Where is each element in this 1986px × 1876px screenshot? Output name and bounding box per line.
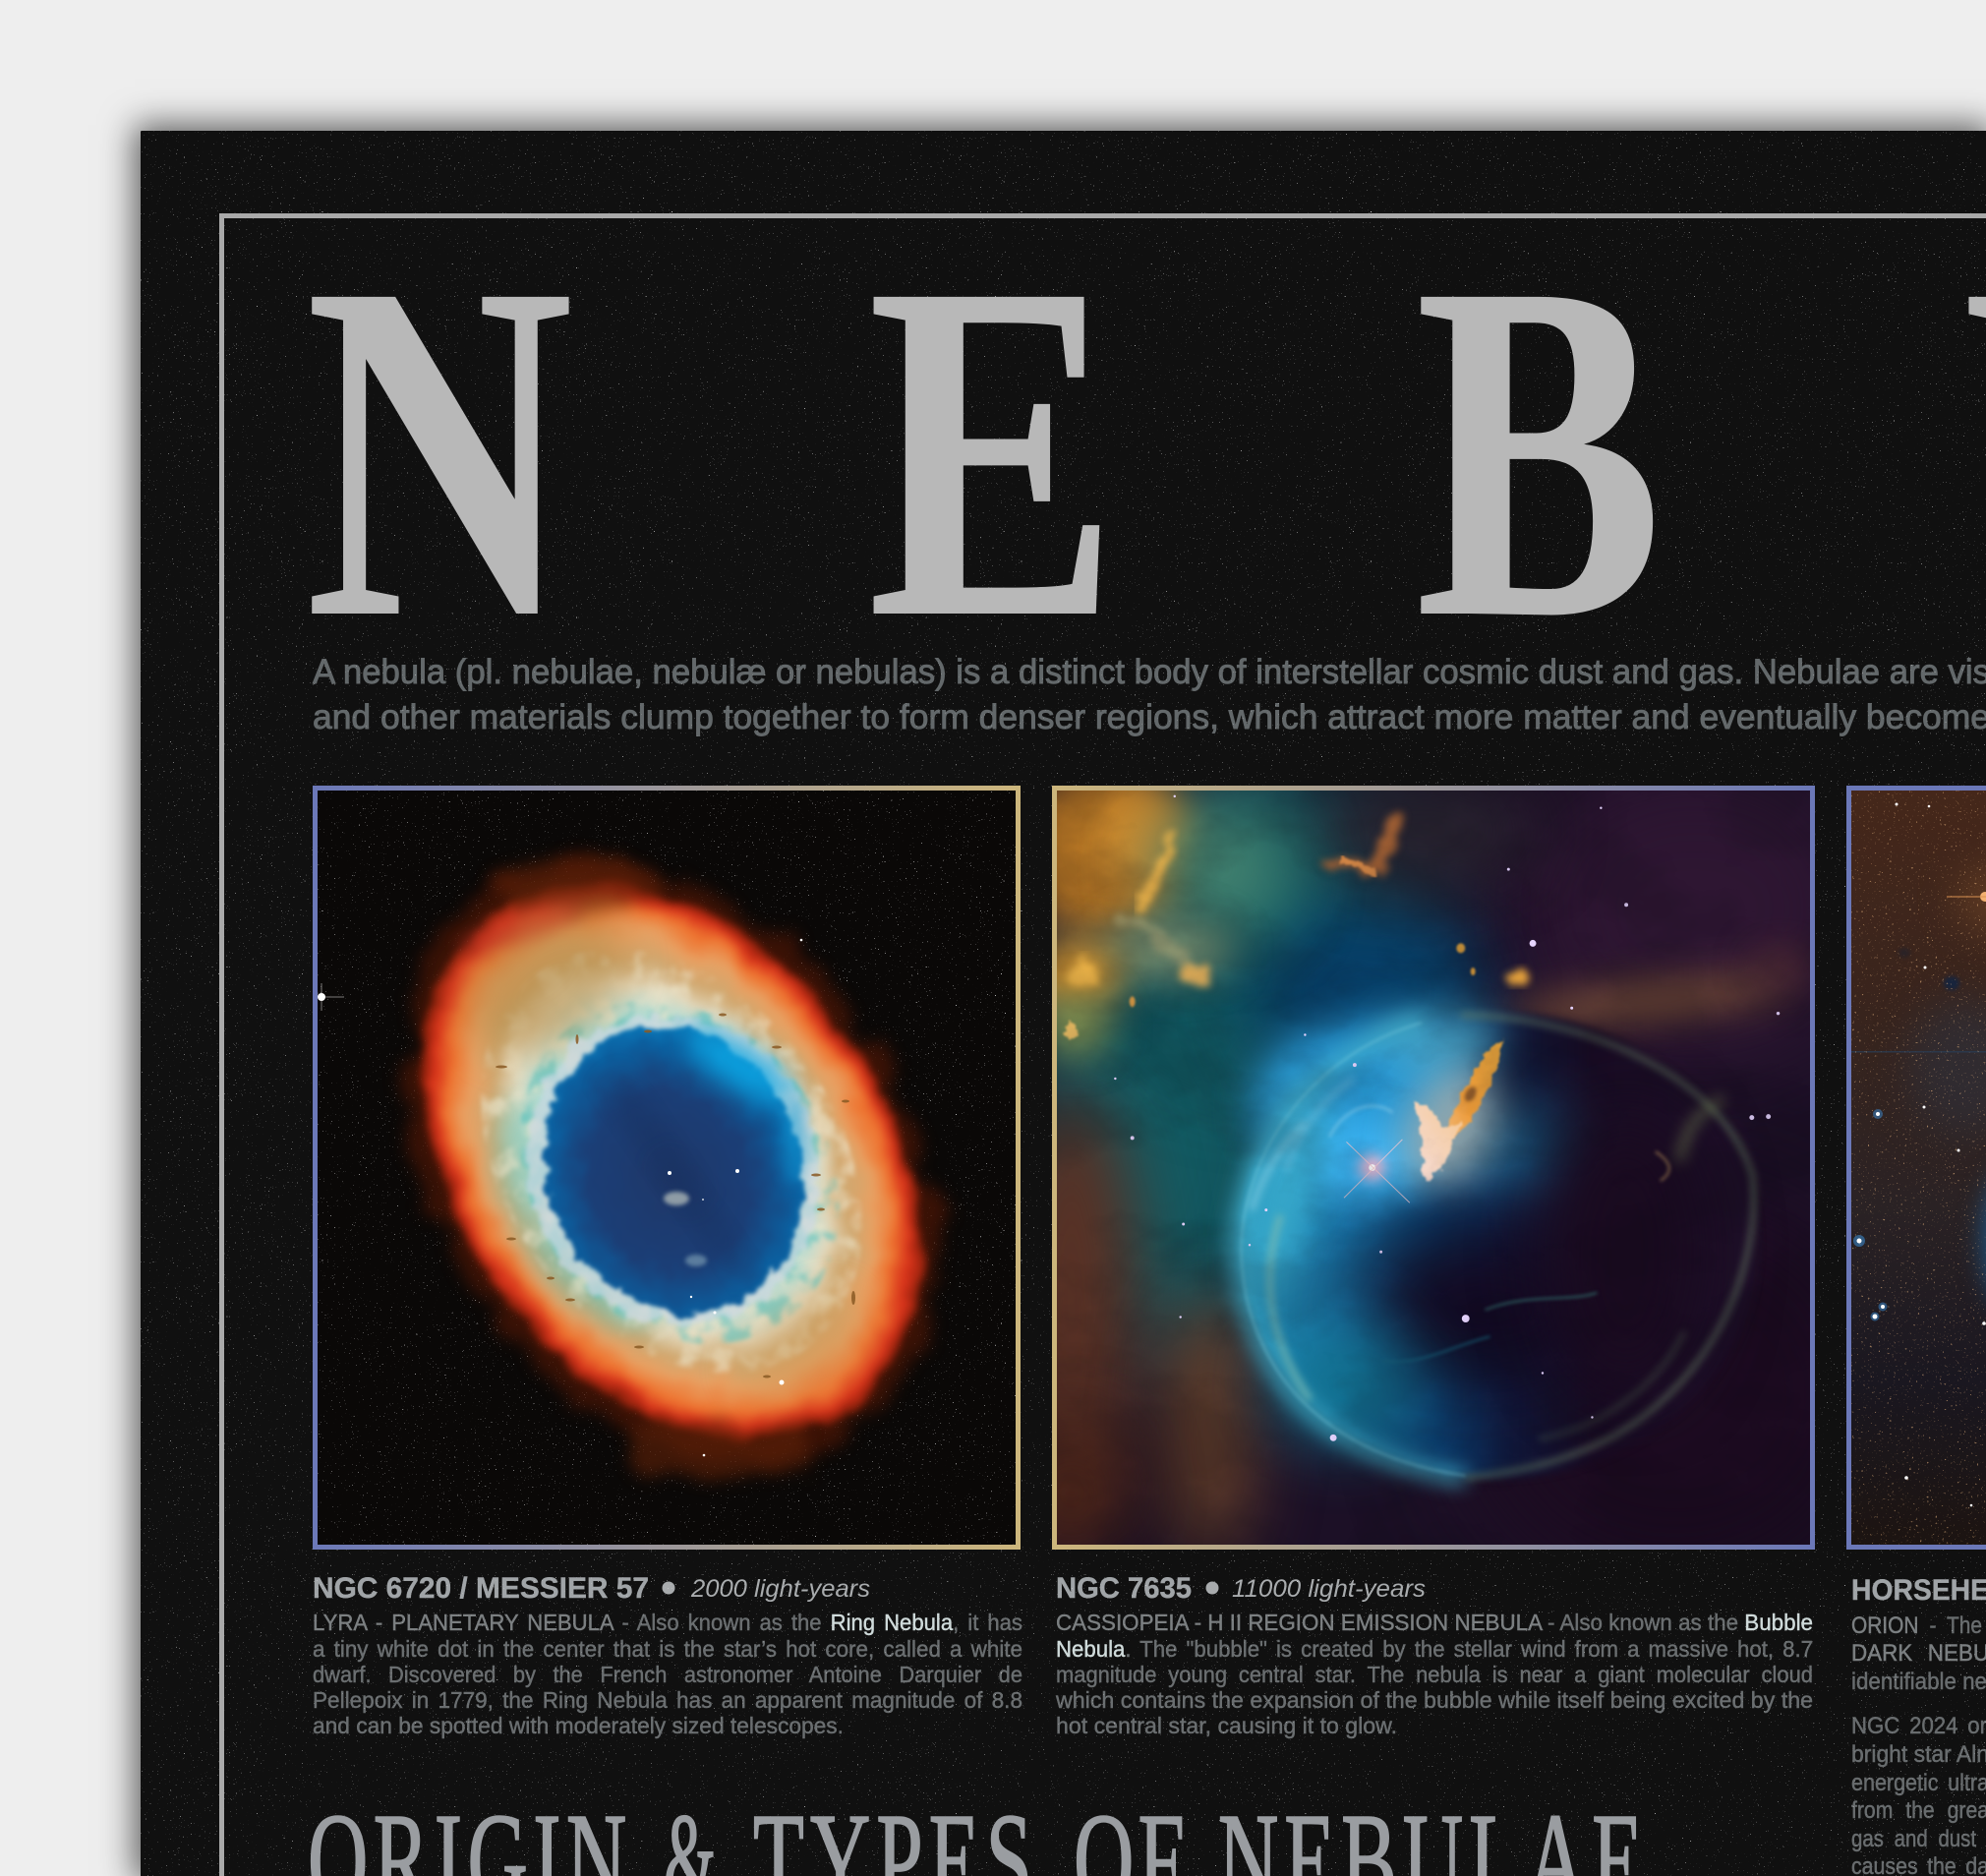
main title: E bbox=[867, 184, 1119, 719]
panel: Horsehead Nebula bbox=[1848, 789, 1986, 1548]
caption: Ring Nebula: NGC 6720 / MESSIER 57 bbox=[313, 1572, 649, 1605]
caption: Bubble Nebula: magnitude young central star. The nebula is near a giant molecular cloud bbox=[1056, 1662, 1813, 1687]
gas clouds bbox=[1057, 791, 1877, 1545]
caption: Bubble Nebula: which contains the expansion of the bubble while itself being excited by the bbox=[1055, 1687, 1813, 1713]
intro paragraph: A nebula (pl. nebulae, nebulæ or nebulas) is a distinct body of interstellar cosmic dust and gas. Nebulae are vis bbox=[313, 653, 1986, 691]
caption: Bubble Nebula: CASSIOPEIA - H II REGION EMISSION NEBULA - Also known as the Bubble bbox=[1056, 1610, 1813, 1635]
caption: Bubble Nebula bbox=[1055, 1572, 1813, 1738]
section heading bbox=[308, 1785, 1643, 1876]
caption: Bubble Nebula: Nebula. The "bubble" is created by the stellar wind from a massive hot, 8.7 bbox=[1056, 1636, 1813, 1662]
main title bbox=[305, 183, 1986, 719]
bright stars bbox=[1853, 802, 1986, 1506]
caption: Ring Nebula bbox=[313, 1572, 1022, 1738]
border bbox=[1054, 789, 1813, 1548]
central cavity bbox=[539, 1023, 810, 1323]
caption: Ring Nebula: a tiny white dot in the center that is the star’s hot core, called a white bbox=[313, 1636, 1022, 1662]
main title: B bbox=[1415, 183, 1664, 718]
caption: Bubble Nebula: hot central star, causing it to glow. bbox=[1056, 1713, 1397, 1738]
subtle dark cloud texture bbox=[1057, 791, 1810, 1545]
panel: Bubble Nebula bbox=[1052, 786, 1815, 1550]
panel: Ring Nebula bbox=[313, 786, 1021, 1550]
stars bbox=[308, 939, 802, 1456]
bright central star bbox=[1344, 1140, 1410, 1202]
caption: Bubble Nebula: 11000 light-years bbox=[1232, 1575, 1426, 1603]
mottled gas bbox=[480, 950, 863, 1375]
border bbox=[315, 789, 1019, 1548]
intro paragraph bbox=[313, 653, 1986, 736]
caption: Ring Nebula: and can be spotted with moderately sized telescopes. bbox=[313, 1713, 844, 1738]
caption: Ring Nebula: Pellepoix in 1779, the Ring Nebula has an apparent magnitude of 8.8 bbox=[313, 1687, 1022, 1713]
main title: N bbox=[305, 183, 574, 718]
caption: Ring Nebula: 2000 light-years bbox=[690, 1575, 870, 1603]
border bbox=[1848, 789, 1986, 1548]
pillar bbox=[1382, 1038, 1519, 1203]
dust flecks bbox=[496, 1013, 855, 1378]
nebula glow and shells bbox=[389, 843, 960, 1467]
wisps bbox=[1144, 836, 1170, 914]
olive upper shell bbox=[452, 895, 641, 1074]
bubble shell bbox=[1236, 1011, 1640, 1481]
caption: Ring Nebula: LYRA - PLANETARY NEBULA - Also known as the Ring Nebula, it has bbox=[313, 1610, 1022, 1635]
intro paragraph: and other materials clump together to form denser regions, which attract more matter and eventually become bbox=[313, 698, 1986, 736]
field stars bbox=[1114, 795, 1780, 1441]
caption: Horsehead Nebula bbox=[1851, 1574, 1986, 1876]
caption: Bubble Nebula: NGC 7635 bbox=[1056, 1572, 1192, 1605]
inner frame bbox=[222, 216, 1986, 1876]
caption: Ring Nebula: dwarf. Discovered by the French astronomer Antoine Darquier de bbox=[313, 1662, 1022, 1687]
dust and glow bbox=[1851, 865, 1986, 1308]
